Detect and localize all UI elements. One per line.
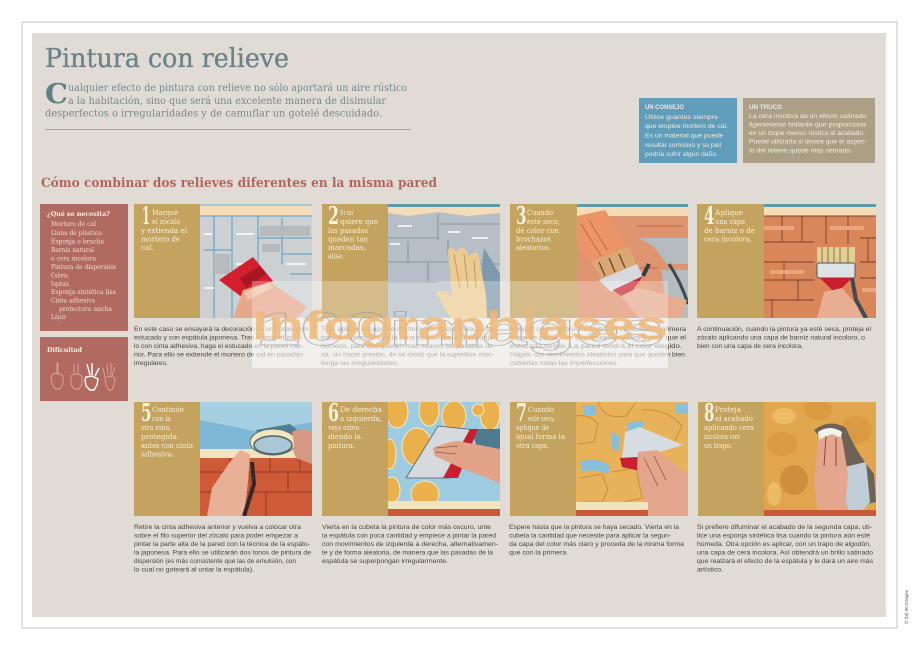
callout: un consejo: Utilice guantes siempre bbox=[645, 114, 719, 121]
panel: materials list: Esponja sintética lisa bbox=[51, 288, 116, 296]
callout: un consejo: resultar corrosivo y su piel bbox=[645, 142, 721, 149]
callout: un truco: UN TRUCO bbox=[749, 104, 782, 111]
step text: lo con cinta adhesiva, haga el estucado en la pared inte- bbox=[134, 343, 303, 350]
illustration: cloth wiping wall bbox=[764, 402, 876, 516]
callout: un truco: La cera incolora da un efecto satinado bbox=[749, 113, 867, 120]
section heading: Cómo combinar dos relieves diferentes en la misma pared bbox=[41, 176, 437, 191]
step number: 8 bbox=[704, 398, 714, 427]
step number: 5 bbox=[141, 398, 152, 427]
step text: lice una esponja sintética lisa cuando la pintura aún esté bbox=[697, 532, 870, 540]
panel: materials list: Llana de plástico bbox=[51, 229, 102, 237]
step caption: aleatorios. bbox=[516, 243, 551, 252]
step caption: pintura. bbox=[328, 441, 355, 450]
step text: A continuación, cuando la pintura ya esté seca, proteja el bbox=[697, 326, 871, 333]
step caption: De derecha bbox=[340, 405, 383, 414]
step text bbox=[510, 326, 686, 367]
step caption: las pasadas bbox=[328, 226, 368, 235]
step caption: marcadas, bbox=[328, 243, 366, 252]
step text bbox=[322, 524, 498, 565]
step text: que realzará el efecto de la espátula y le dará un aire más bbox=[697, 558, 873, 565]
caption box bbox=[510, 402, 576, 516]
step text: toda la superficie con la llana de plástico o la esponja bbox=[321, 334, 493, 342]
step caption: con la bbox=[152, 414, 172, 423]
illustration: dark paint with trowel bbox=[388, 402, 500, 516]
panel: difficulty: Dificultad bbox=[47, 346, 82, 354]
step number: 6 bbox=[328, 398, 339, 427]
icon: hand one finger bbox=[51, 363, 63, 389]
step caption: aplicando cera bbox=[704, 423, 755, 432]
panel: materials list: Cubeta bbox=[51, 272, 68, 280]
step caption: y extienda el bbox=[140, 226, 188, 235]
step text: da capa del color más claro y proceda de la misma forma bbox=[509, 541, 684, 548]
step caption: quiere que bbox=[340, 217, 378, 226]
callout: un truco: Puede utilizarla si desea que el aspec- bbox=[749, 138, 867, 146]
callout: un consejo: Es un material que puede bbox=[645, 132, 724, 140]
step caption: vaya exten- bbox=[327, 423, 361, 432]
step caption: igual forma la bbox=[516, 432, 566, 441]
step caption: Cuando bbox=[527, 208, 553, 217]
panel: materials list: protectora ancha bbox=[59, 305, 112, 313]
step caption: esté seco, bbox=[527, 217, 560, 226]
step caption: el zócalo bbox=[152, 217, 180, 226]
step text: húmeda, para que queden más suaves las pasadas de bbox=[321, 343, 493, 350]
callout: un consejo: que emplee mortero de cal. bbox=[645, 123, 728, 130]
illustration: hand smoothing grey wall bbox=[388, 204, 500, 318]
step caption bbox=[328, 208, 378, 260]
step 8 bbox=[697, 398, 876, 574]
step text bbox=[134, 326, 308, 367]
intro paragraph: desperfectos o irregularidades y de camuflar un gotelé descuidado. bbox=[45, 108, 382, 120]
step caption: queden tan bbox=[328, 234, 368, 244]
callout: un truco bbox=[743, 98, 875, 163]
panel: materials list: Cinta adhesiva bbox=[51, 296, 95, 304]
panel: materials list: Pintura de dispersión bbox=[51, 263, 116, 271]
step text: tenga las irregularidades. bbox=[321, 360, 399, 367]
step text: irregulares. bbox=[134, 360, 168, 367]
panel: difficulty bbox=[40, 337, 128, 401]
step text: Si prefiere difuminar el acabado de la segunda capa, uti- bbox=[697, 524, 872, 531]
illustration: second layer of paint bbox=[576, 402, 688, 516]
step caption bbox=[516, 405, 566, 450]
step text: que con la primera. bbox=[509, 550, 568, 556]
step number: 4 bbox=[704, 201, 714, 230]
intro paragraph: a la habitación, sino que será una excelente manera de disimular bbox=[68, 95, 386, 107]
step text: Hágalo con movimientos aleatorios para que queden bien bbox=[510, 352, 685, 358]
step caption bbox=[704, 208, 755, 244]
step 7 bbox=[509, 398, 688, 556]
step caption: otra zona, bbox=[141, 423, 171, 432]
callout: un consejo: UN CONSEJO bbox=[645, 104, 684, 111]
caption box bbox=[134, 204, 200, 318]
step text bbox=[697, 524, 873, 574]
step number: 2 bbox=[328, 201, 339, 230]
illustration: varnish brush on brick bbox=[764, 204, 876, 318]
step caption: incolora con bbox=[704, 432, 740, 441]
title: Pintura con relieve bbox=[45, 44, 289, 74]
caption box bbox=[698, 402, 764, 516]
step text: la japonesa. Para ello se utilizarán dos tonos de pintura de bbox=[134, 550, 311, 556]
watermark bbox=[252, 281, 668, 368]
step caption: Aplique bbox=[714, 208, 743, 217]
step text bbox=[509, 524, 684, 556]
panel: materials list: Esponja o brocha bbox=[51, 238, 104, 246]
panel: materials list: Barniz natural bbox=[51, 246, 94, 254]
step text bbox=[697, 326, 871, 350]
caption box bbox=[322, 402, 388, 516]
intro paragraph: C bbox=[45, 79, 68, 110]
step text: cubiertas todas las imperfecciones. bbox=[510, 360, 618, 367]
step text: da, sin hacer presión, de tal modo que la superficie man- bbox=[321, 352, 494, 358]
illustration: brush on wall bbox=[577, 204, 688, 318]
step caption: brochazos bbox=[516, 234, 551, 244]
step caption: Si no bbox=[340, 208, 353, 217]
step caption: el acabado bbox=[715, 414, 754, 423]
step 2 bbox=[321, 201, 500, 367]
panel: materials list: Lápiz bbox=[51, 313, 67, 321]
step text: estucado y con espátula japonesa. Tras marcar el zóca- bbox=[134, 334, 303, 342]
step text: pintar la parte alta de la pared con la técnica de la espátu- bbox=[134, 541, 310, 548]
step caption: Marque bbox=[152, 208, 178, 217]
step text: Aplique con una brocha, sobre el estucado, la primera bbox=[510, 326, 686, 333]
panel: materials list: Espátula bbox=[51, 280, 69, 288]
step caption bbox=[704, 405, 755, 450]
step caption: adhesiva. bbox=[141, 450, 174, 458]
step caption: mortero de bbox=[141, 234, 180, 244]
step number: 7 bbox=[516, 398, 527, 427]
step caption: antes con cinta bbox=[141, 441, 194, 450]
step caption: de barniz o de bbox=[704, 226, 755, 235]
panel: materials list bbox=[40, 204, 128, 331]
callout: un truco: en un toque menos rústico al acabado. bbox=[749, 130, 865, 137]
icon: hand four fingers bbox=[103, 363, 115, 390]
step 5 bbox=[134, 398, 312, 574]
step caption bbox=[327, 405, 383, 450]
step number: 3 bbox=[516, 201, 526, 230]
callout: un consejo bbox=[639, 98, 737, 163]
step caption: Cuando bbox=[528, 405, 554, 414]
step caption: otra capa. bbox=[516, 441, 549, 450]
step text: la espátula con poca cantidad y empiece a pintar la pared bbox=[322, 532, 496, 540]
step caption bbox=[141, 405, 194, 458]
callout: un consejo: podría sufrir algún daño. bbox=[645, 151, 718, 158]
step 3 bbox=[510, 201, 688, 367]
step 4 bbox=[697, 201, 876, 350]
callout: un truco: to del relieve quede más cebrado. bbox=[749, 148, 852, 154]
step text: Retire la cinta adhesiva anterior y vuelva a colocar otra bbox=[134, 524, 301, 531]
panel: materials list: Mortero de cal bbox=[51, 220, 96, 228]
step text: sobre el filo superior del zócalo para poder empezar a bbox=[134, 532, 298, 540]
step 6 bbox=[322, 394, 500, 565]
step caption bbox=[140, 208, 188, 252]
step caption: a izquierda, bbox=[340, 414, 382, 423]
illustration: adhesive tape bbox=[200, 402, 312, 516]
step text: espátula se superpongan irregularmente. bbox=[322, 558, 448, 565]
step caption: dé color con bbox=[516, 226, 559, 235]
step text: zócalo aplicando una capa de barniz natural incoloro, o bbox=[697, 334, 865, 342]
intro paragraph bbox=[45, 79, 407, 120]
panel: materials list: o cera incolora bbox=[51, 254, 96, 262]
step text: dispersión (es más consistente que las de emulsión, con bbox=[134, 558, 296, 565]
watermark: Infographiases bbox=[252, 304, 668, 348]
step caption: Proteja bbox=[715, 405, 742, 414]
step text: capa de pintura de dispersión del color y deje que el bbox=[510, 334, 686, 342]
step text: rior. Para ello se extiende el mortero de cal en pasadas bbox=[134, 352, 303, 358]
step caption: cal. bbox=[141, 243, 154, 252]
step caption: alise. bbox=[328, 252, 344, 260]
icon: hand three fingers, highlighted bbox=[85, 363, 99, 390]
panel: materials list: ¿Qué se necesita? bbox=[47, 210, 110, 218]
step text bbox=[134, 524, 311, 574]
illustration: trowel on grey wall bbox=[200, 204, 312, 318]
callout: un truco: ligeramente brillante que proporciona bbox=[749, 122, 867, 128]
step caption: esté seca, bbox=[528, 414, 555, 423]
step caption bbox=[516, 208, 560, 252]
step text: bien con una capa de cera incolora. bbox=[697, 343, 803, 350]
step text: Espere hasta que la pintura se haya secado. Vierta en la bbox=[509, 524, 679, 531]
step caption: un trapo. bbox=[704, 441, 732, 450]
caption box bbox=[322, 204, 388, 318]
step text: una capa de cera incolora. Así obtendrá un brillo satinado bbox=[697, 550, 873, 556]
step text: Vierta en la cubeta la pintura de color más oscuro, unte bbox=[322, 524, 491, 531]
step caption: aplique de bbox=[516, 423, 549, 432]
step text: En este caso se ensayará la decoración de un zócalo con bbox=[134, 326, 308, 333]
step text: te y de forma aleatoria, de manera que las pasadas de la bbox=[322, 550, 493, 556]
step 1: 1 bbox=[142, 201, 150, 230]
step text: húmeda. Otra opción es aplicar, con un trapo de algodón, bbox=[697, 541, 871, 548]
step caption: cera incolora. bbox=[704, 234, 752, 244]
caption box bbox=[697, 204, 764, 318]
watermark: 100images bbox=[256, 303, 664, 355]
step 1 bbox=[134, 201, 312, 367]
credit: © Sol 90 Images bbox=[903, 589, 910, 624]
step text: Tras aplicar la capa de mortero con la espátula, alise bbox=[321, 326, 494, 333]
caption box bbox=[510, 204, 577, 318]
step text: artístico. bbox=[697, 566, 723, 574]
step text: lo cual no goteará al untar la espátula). bbox=[134, 566, 254, 574]
step text bbox=[321, 326, 494, 367]
step caption: protegida bbox=[141, 432, 178, 441]
icon: hand two fingers bbox=[71, 363, 82, 389]
step caption: una capa bbox=[715, 217, 746, 226]
step text: cubeta la cantidad que necesite para aplicar la segun- bbox=[509, 532, 671, 540]
caption box bbox=[134, 402, 200, 516]
step text: estucado seque. La pared tendrá el color elegido. bbox=[510, 343, 682, 350]
intro paragraph: ualquier efecto de pintura con relieve no sólo aportará un aire rústico bbox=[68, 82, 407, 94]
step caption: diendo la bbox=[328, 432, 362, 441]
step text: con movimientos de izquierda a derecha, alternativamen- bbox=[322, 541, 498, 548]
step caption: Continúe bbox=[152, 405, 184, 414]
